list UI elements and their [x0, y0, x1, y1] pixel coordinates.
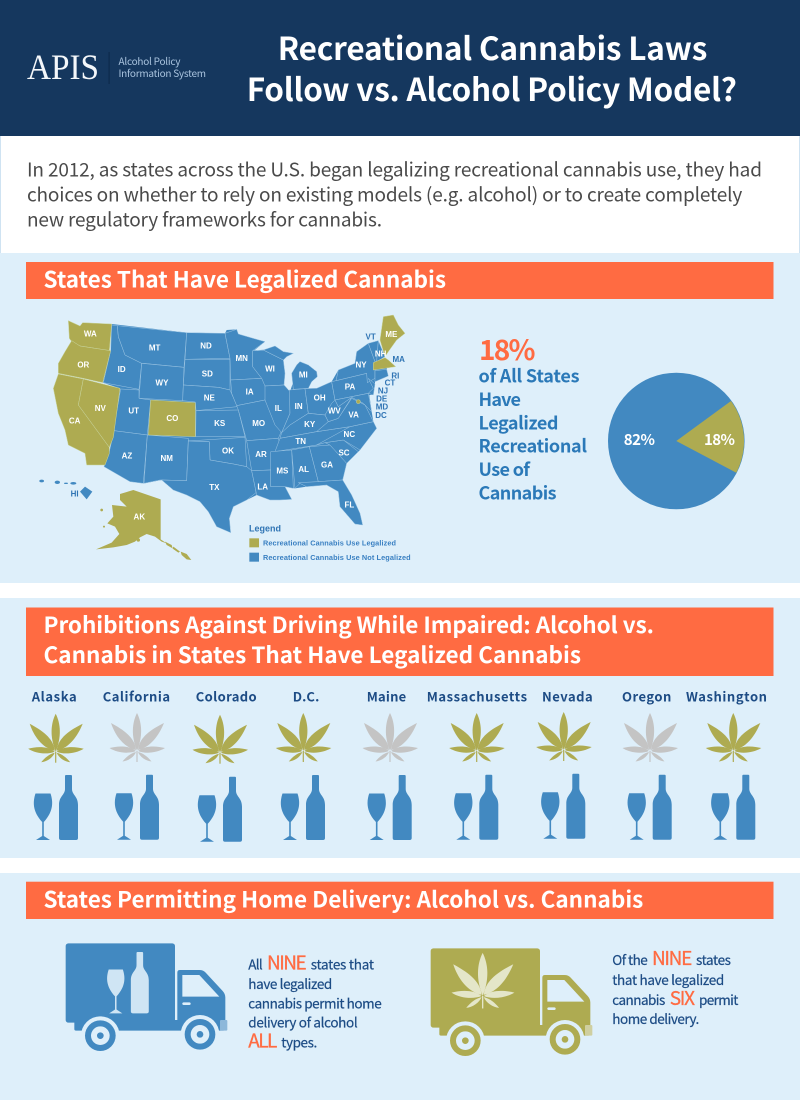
logo: APIS: APIS	[27, 47, 99, 87]
state column: Oregon	[622, 687, 678, 840]
state column: D.C.	[276, 687, 331, 840]
logo: APIS: Alcohol Policy	[118, 53, 181, 68]
map labels: WI	[265, 364, 275, 373]
heading: home delivery: States Permitting Home Delivery: Alcohol vs. Cannabis	[44, 882, 643, 914]
panel: states that have legalized cannabis	[0, 253, 800, 583]
callout: 18 percent: of All States	[478, 363, 580, 389]
map labels: MO	[252, 419, 265, 428]
US map	[39, 315, 411, 562]
map labels: ND	[200, 342, 212, 351]
map labels: GA	[321, 461, 333, 470]
text: alcohol delivery: types.	[281, 1031, 317, 1051]
heading: states legalized: States That Have Legalized Cannabis	[44, 262, 446, 294]
title: Follow vs. Alcohol Policy Model?	[247, 65, 737, 111]
map labels: DE	[376, 395, 388, 404]
map labels: HI	[71, 490, 79, 499]
state column: Maine	[362, 687, 418, 840]
map labels	[69, 330, 405, 521]
state column: Massachusetts	[427, 687, 527, 840]
text: cannabis delivery: NINE	[652, 944, 692, 971]
callout: 18 percent: Have	[478, 386, 521, 412]
map labels: IA	[246, 388, 254, 397]
map labels: NY	[355, 361, 367, 370]
map labels: OR	[77, 361, 90, 370]
map labels: MS	[276, 467, 289, 476]
state column: Colorado	[192, 687, 257, 842]
heading: states legalized	[26, 262, 774, 299]
callout: 18 percent: Recreational	[478, 433, 587, 459]
map labels: NH	[375, 350, 387, 359]
map labels: MD	[376, 403, 388, 412]
map legend: Legend	[249, 524, 281, 534]
map labels: IN	[295, 402, 303, 411]
callout: 18 percent	[478, 329, 587, 505]
logo: APIS	[27, 47, 206, 87]
map legend: Recreational Cannabis Use Not Legalized	[263, 553, 411, 562]
map labels: AR	[255, 450, 267, 459]
logo: APIS: Information System	[118, 65, 206, 80]
state column: California: California	[103, 687, 170, 706]
map labels: NC	[344, 430, 355, 439]
state column: Alaska: Alaska	[31, 687, 77, 706]
pie chart: 18%	[704, 429, 735, 450]
map labels: OH	[314, 394, 326, 403]
header band	[0, 0, 800, 136]
map labels: AK	[134, 512, 145, 521]
text: cannabis delivery	[612, 944, 738, 1028]
callout: 18 percent: Legalized	[478, 409, 558, 435]
map labels: UT	[128, 406, 139, 415]
map labels: ID	[118, 365, 126, 374]
map labels: CT	[385, 379, 395, 388]
map labels: VT	[366, 332, 376, 341]
map labels: WY	[156, 378, 169, 387]
map labels: IL	[275, 404, 282, 413]
map labels: NJ	[378, 386, 388, 395]
map labels: DC	[375, 411, 387, 420]
map labels: WV	[328, 407, 341, 416]
map labels: LA	[257, 483, 268, 492]
state column: D.C.: D.C.	[293, 687, 319, 706]
state column: California	[103, 687, 170, 840]
state column: Washington	[686, 687, 767, 840]
map labels: NV	[95, 404, 107, 413]
map labels: TN	[295, 437, 306, 446]
intro text	[27, 156, 762, 232]
text: alcohol delivery: have legalized	[248, 973, 332, 993]
title: Recreational Cannabis Laws	[278, 24, 707, 70]
title	[247, 24, 737, 111]
text: alcohol delivery: delivery of alcohol	[248, 1012, 358, 1032]
map labels: MA	[392, 355, 405, 364]
Hawaii	[39, 480, 92, 499]
callout: 18 percent: Cannabis	[478, 479, 557, 505]
heading: prohibitions	[26, 608, 774, 676]
map labels: TX	[209, 483, 220, 492]
legalized states	[53, 315, 405, 465]
text: cannabis delivery: Of the	[612, 949, 648, 969]
state column: Colorado: Colorado	[196, 687, 257, 706]
intro text: In 2012, as states across the U.S. began legalizing recreational cannabis use, they had	[27, 156, 762, 182]
state column: Washington: Washington	[686, 687, 767, 706]
text: alcohol delivery: cannabis permit home	[248, 992, 382, 1012]
pie chart: 82%	[624, 429, 655, 450]
panel: prohibitions against driving while impaired	[0, 598, 800, 858]
map labels: OK	[222, 446, 234, 455]
map labels: AL	[298, 465, 309, 474]
map labels: SC	[338, 449, 350, 458]
map labels: NE	[204, 394, 216, 403]
state column: Nevada	[536, 687, 593, 839]
text: cannabis delivery: SIX	[670, 984, 695, 1011]
map labels: FL	[344, 500, 354, 509]
text: cannabis delivery: states	[696, 949, 731, 969]
map labels: KS	[214, 419, 226, 428]
text: cannabis delivery: cannabis	[612, 989, 665, 1009]
map legend	[249, 524, 411, 562]
map legend: Recreational Cannabis Use Legalized	[263, 538, 396, 547]
map labels: SD	[202, 370, 213, 379]
text: alcohol delivery: All	[248, 953, 263, 973]
panel: home delivery	[0, 873, 800, 1100]
map labels: WA	[84, 330, 97, 339]
state column: Alaska	[28, 687, 84, 840]
map labels: MI	[299, 370, 308, 379]
map labels: KY	[304, 420, 316, 429]
icon: blue truck with glass and bottle	[66, 943, 227, 1055]
map labels: MN	[235, 354, 248, 363]
state column: Oregon: Oregon	[622, 687, 671, 706]
state column: Massachusetts: Massachusetts	[427, 687, 527, 706]
text: alcohol delivery	[248, 948, 382, 1053]
state column: Maine: Maine	[367, 687, 406, 706]
state column: Nevada: Nevada	[542, 687, 593, 706]
heading: prohibitions: Cannabis in States That Have Legalized Cannabis	[44, 638, 581, 670]
map labels: AZ	[122, 452, 132, 461]
icon: olive truck with leaf	[431, 948, 592, 1060]
intro text: new regulatory frameworks for cannabis.	[27, 206, 382, 232]
map labels: ME	[385, 330, 398, 339]
callout: 18 percent: Use of	[478, 456, 531, 482]
callout: 18 percent: 18%	[479, 329, 536, 369]
map labels: PA	[345, 383, 355, 392]
heading: home delivery	[26, 882, 774, 919]
text: cannabis delivery: permit	[699, 989, 738, 1009]
text: cannabis delivery: that have legalized	[612, 969, 724, 989]
map labels: VA	[348, 410, 359, 419]
heading: prohibitions: Prohibitions Against Driving While Impaired: Alcohol vs.	[44, 608, 654, 640]
text: cannabis delivery: home delivery.	[612, 1008, 699, 1028]
text: alcohol delivery: NINE	[267, 948, 307, 975]
text: alcohol delivery: states that	[311, 953, 374, 973]
intro text: choices on whether to rely on existing models (e.g. alcohol) or to create completely	[27, 180, 742, 208]
text: alcohol delivery: ALL	[248, 1026, 277, 1053]
map labels: NM	[160, 454, 173, 463]
map labels: CO	[166, 414, 178, 423]
Alaska	[96, 490, 191, 560]
map labels: MT	[149, 343, 161, 352]
map labels: CA	[69, 417, 81, 426]
pie chart	[608, 373, 745, 509]
map labels: RI	[391, 371, 399, 380]
